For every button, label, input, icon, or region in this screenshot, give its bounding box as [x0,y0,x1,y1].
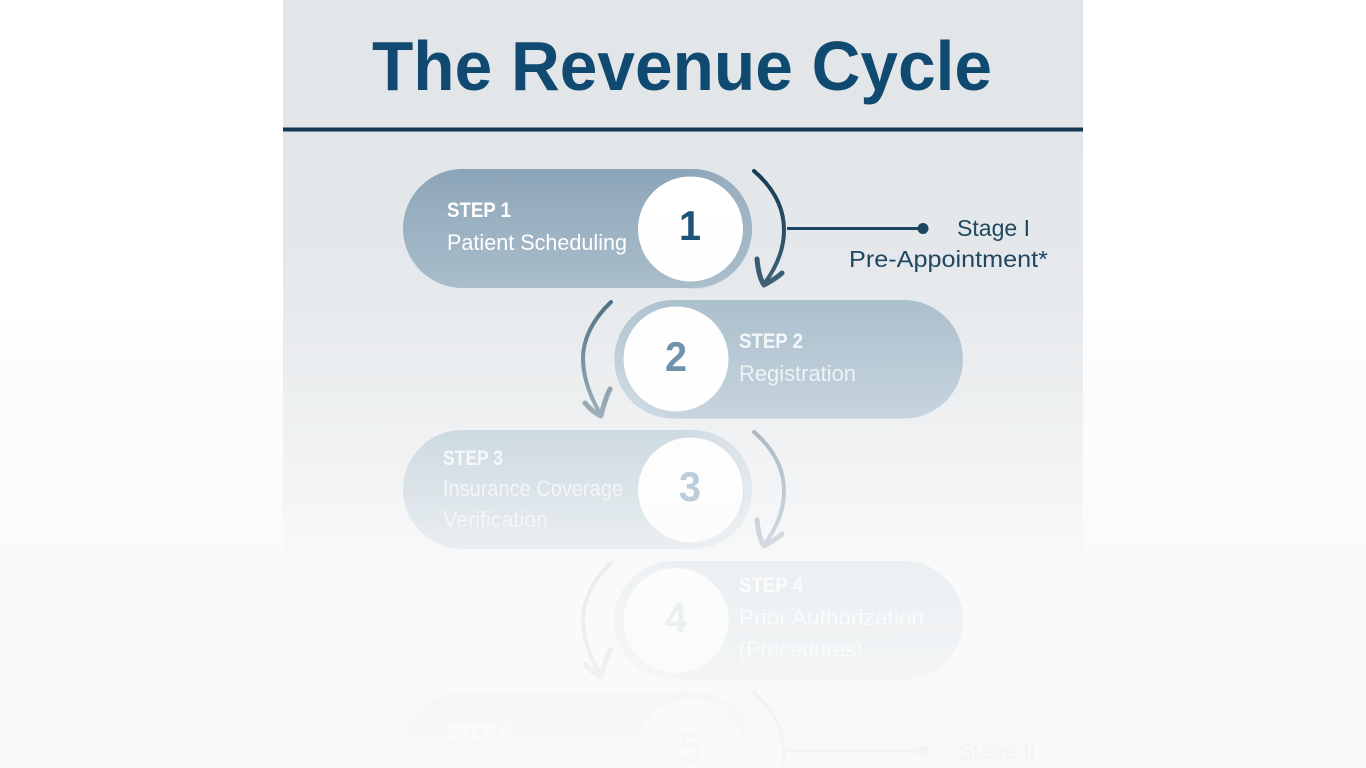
panel background [283,0,1083,768]
step 2 ring [615,350,651,412]
connector: stage II [787,746,928,756]
step 3 panel [403,430,752,549]
step 3 ring [714,434,752,542]
step 1 ring [686,174,752,289]
arrow: step 5 onward [754,693,784,768]
step 1 description: Patient Scheduling [447,230,627,255]
step 5 number badge [638,699,743,768]
step 3 number: 3 [679,463,701,510]
step 1 pill [403,169,752,288]
step 3 description: Insurance Coverage [443,476,623,501]
header rule [283,128,1083,132]
arrow: step 1 to step 2 [754,171,784,285]
step 4 number: 4 [665,594,688,641]
stage I label: Pre-Appointment* [849,246,1048,272]
arrow: step 2 to step 3 [583,302,611,416]
stage I label: Stage I [957,215,1030,241]
title: The Revenue Cycle [372,27,992,105]
arrow: step 3 to step 4 [754,432,784,546]
arrow: step 4 to step 5 [583,563,611,677]
step 5 ring [680,696,750,768]
step 4 description: (Procedures) [739,637,863,662]
step 1 number badge [638,176,743,282]
step 3 description: Verification [443,507,548,532]
step 1 label: STEP 1 [447,199,511,222]
step 1 panel [403,169,752,288]
step 3 label: STEP 3 [443,447,503,470]
step 3 pill [403,430,752,549]
step 5 label: STEP 5 [447,721,511,744]
step 4 panel [614,561,963,658]
step 5 panel [403,692,752,768]
step 2 description: Registration [739,361,856,386]
step 4 pill [614,561,963,680]
step 4 number badge [624,568,728,673]
connector: stage I [787,223,928,234]
step 5 pill [403,692,752,768]
stage I label [849,215,1048,272]
step 4 description: Prior Authorization [739,605,924,630]
step 2 number: 2 [665,333,687,380]
step 1 number: 1 [679,202,701,249]
step 4 ring [619,565,700,675]
step 2 panel [614,300,963,418]
stage II label: Stage II [958,738,1036,764]
step 3 number badge [638,438,743,542]
step 2 pill [614,300,963,418]
step 2 label: STEP 2 [739,330,803,353]
step 4 label: STEP 4 [739,574,803,597]
step 2 number badge [624,306,728,412]
